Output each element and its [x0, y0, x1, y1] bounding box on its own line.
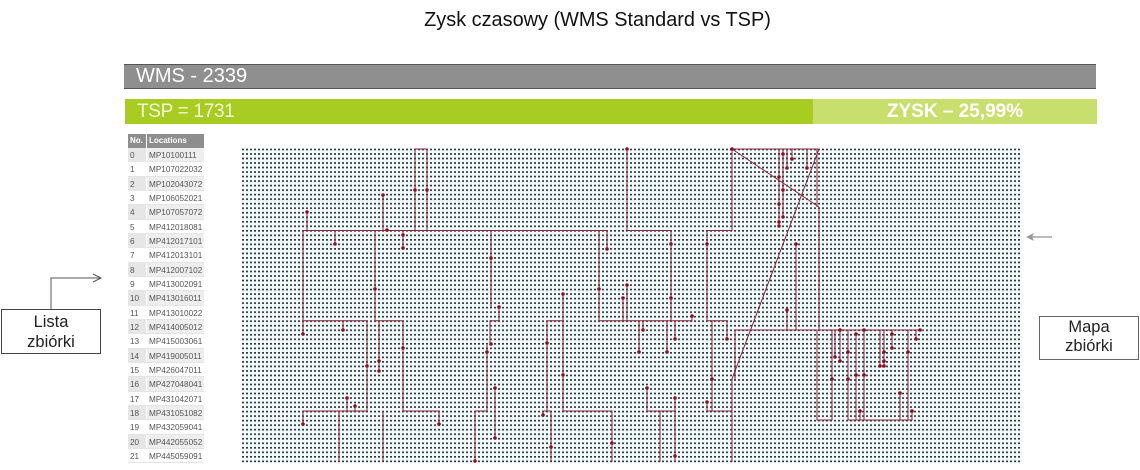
- table: picking list: MP414005012: [149, 323, 202, 332]
- table: picking list: MP412007102: [149, 266, 202, 275]
- table: picking list: MP415003061: [149, 337, 202, 346]
- table: picking list: MP413002091: [149, 280, 202, 289]
- arrow: list to table: [50, 274, 102, 309]
- table: picking list: MP102043072: [149, 180, 202, 189]
- table: picking list: Locations: [149, 136, 187, 145]
- table: picking list: No.: [130, 136, 143, 145]
- label: picking list: Lista: [34, 313, 68, 331]
- table: picking list: 17: [130, 395, 139, 404]
- label: picking map: Mapa: [1068, 318, 1110, 336]
- table: picking list: 3: [130, 194, 135, 203]
- label: picking list: [1, 309, 101, 354]
- bar: WMS: [124, 64, 1096, 89]
- table: picking list: MP412013101: [149, 251, 202, 260]
- table: picking list: MP442055052: [149, 438, 202, 447]
- table: picking list: MP10100111: [149, 151, 196, 160]
- table: picking list: 1: [130, 165, 135, 174]
- bar: profit: ZYSK – 25,99%: [887, 101, 1023, 122]
- table: picking list: 11: [130, 309, 138, 318]
- table: picking list: 14: [130, 352, 139, 361]
- table: picking list: MP431042071: [149, 395, 202, 404]
- table: picking list: 8: [130, 266, 135, 275]
- table: picking list: [128, 134, 204, 463]
- table: picking list: MP413016011: [149, 294, 202, 303]
- table: picking list: 4: [130, 208, 135, 217]
- table: picking list: MP426047011: [149, 366, 202, 375]
- title: Zysk czasowy (WMS Standard vs TSP): [424, 9, 771, 31]
- table: picking list: 12: [130, 323, 139, 332]
- table: picking list: MP412018081: [149, 223, 202, 232]
- table: picking list: 20: [130, 438, 139, 447]
- table: picking list: MP431051082: [149, 409, 202, 418]
- table: picking list: 21: [130, 452, 139, 461]
- bar: TSP: TSP = 1731: [137, 101, 235, 122]
- table: picking list: MP107022032: [149, 165, 202, 174]
- dot grid: [242, 149, 1022, 463]
- route stops: [301, 147, 922, 463]
- table: picking list: 6: [130, 237, 135, 246]
- table: picking list: 13: [130, 337, 139, 346]
- table: picking list: MP106052021: [149, 194, 202, 203]
- bar: profit: [813, 99, 1097, 124]
- picking routes: [303, 149, 920, 462]
- table: picking list: MP445059091: [149, 452, 202, 461]
- arrow: map label to map: [1026, 233, 1052, 241]
- table: picking list: MP413010022: [149, 309, 202, 318]
- label: picking list: zbiórki: [27, 333, 75, 351]
- table: picking list: 2: [130, 180, 135, 189]
- table: picking list: 18: [130, 409, 139, 418]
- label: picking map: zbiórki: [1065, 337, 1113, 355]
- table: picking list: 9: [130, 280, 135, 289]
- table: picking list: MP107057072: [149, 208, 202, 217]
- table: picking list: MP432059041: [149, 423, 202, 432]
- table: picking list: MP427048041: [149, 380, 202, 389]
- bar: TSP: [125, 99, 813, 124]
- table: picking list: 16: [130, 380, 139, 389]
- table: picking list: 0: [130, 151, 135, 160]
- table: picking list: MP412017101: [149, 237, 202, 246]
- table: picking list: 15: [130, 366, 139, 375]
- table: picking list: MP419005011: [149, 352, 202, 361]
- bar: WMS: WMS - 2339: [136, 65, 247, 87]
- table: picking list: 5: [130, 223, 135, 232]
- table: picking list: 10: [130, 294, 139, 303]
- table: picking list: 19: [130, 423, 139, 432]
- label: picking map: [1039, 316, 1139, 360]
- table: picking list: 7: [130, 251, 135, 260]
